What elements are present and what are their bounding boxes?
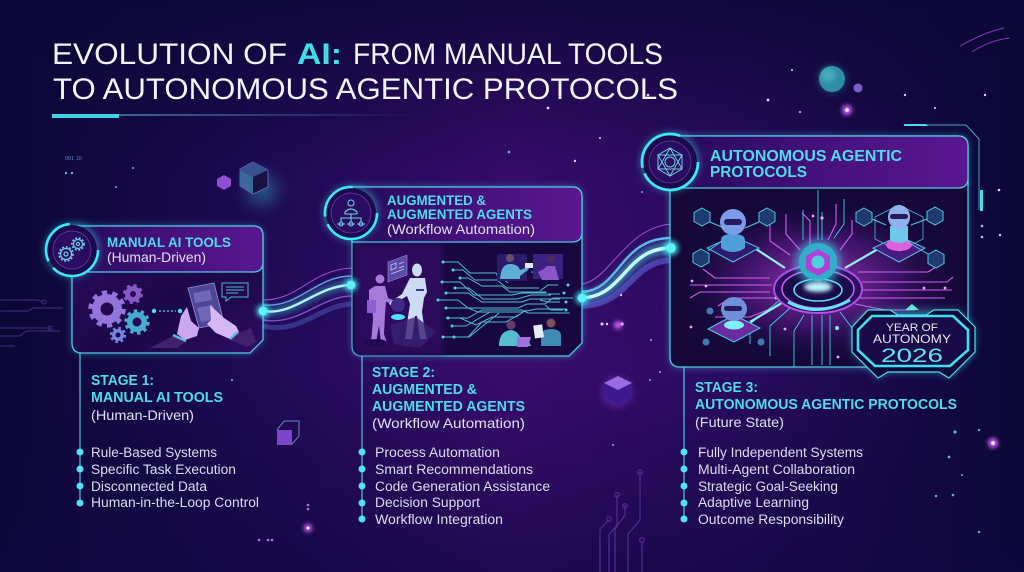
stage 3 text block: Strategic Goal-Seeking	[698, 479, 838, 494]
stage 2 text block: (Workflow Automation)	[372, 415, 525, 431]
stage 2 text block: STAGE 2:	[372, 365, 435, 381]
panel: stage 3 illustration card	[641, 133, 968, 367]
stage 3 text block: AUTONOMOUS AGENTIC PROTOCOLS	[695, 397, 957, 413]
stage 2 text block: AUGMENTED &	[372, 382, 478, 398]
stage 1 text block: Disconnected Data	[91, 479, 207, 494]
connector node stage 3	[663, 240, 679, 256]
stage 1 text block: Specific Task Execution	[91, 462, 236, 477]
stage 1 text block: (Human-Driven)	[91, 407, 194, 423]
robot figure	[389, 264, 427, 339]
robot agent bottom left	[702, 297, 764, 346]
icon: stage 3 network badge	[641, 133, 699, 191]
stage 2 text block: Workflow Integration	[375, 512, 503, 527]
stage 2 text block: Decision Support	[375, 495, 480, 510]
stage 3 text block: Outcome Responsibility	[698, 512, 844, 527]
icon: cube lower centre	[277, 421, 299, 445]
title: EVOLUTION OF	[52, 38, 287, 71]
small data text top left: 001 10	[65, 156, 82, 162]
stage 1 text block: Human-in-the-Loop Control	[91, 495, 259, 510]
panel: stage 1 illustration card	[45, 223, 263, 353]
stage 3 text block: Adaptive Learning	[698, 495, 809, 510]
badge: year of autonomy 2026	[852, 304, 975, 378]
title	[52, 38, 678, 106]
people on cards	[497, 254, 563, 347]
decorative left circuit traces	[0, 300, 63, 346]
stage 1 header band: MANUAL AI TOOLS	[107, 234, 231, 250]
stage 3 header band: PROTOCOLS	[710, 164, 807, 181]
title underline	[52, 114, 419, 118]
stage 1 text block: MANUAL AI TOOLS	[91, 390, 223, 406]
title: TO AUTONOMOUS AGENTIC PROTOCOLS	[53, 73, 678, 106]
stage 3 text block: STAGE 3:	[695, 380, 758, 396]
robot agent top right	[873, 205, 925, 262]
hex nodes	[693, 207, 944, 268]
stage 2 text block: Process Automation	[375, 445, 500, 460]
radial circuit lines	[690, 190, 953, 367]
decorative bottom-center circuit traces	[600, 470, 644, 572]
badge: year of autonomy 2026: AUTONOMY	[873, 334, 951, 346]
title: AI:	[297, 38, 342, 71]
stage 2 header band	[352, 187, 582, 242]
stage 3 text block	[680, 367, 957, 527]
icon: stage 1 gear badge	[45, 223, 99, 277]
human figure	[365, 274, 398, 347]
stage 1 header band: (Human-Driven)	[107, 249, 206, 265]
badge: year of autonomy 2026: YEAR OF	[886, 322, 938, 334]
robot agent top left	[707, 209, 759, 262]
stage 2 text block: Smart Recommendations	[375, 462, 533, 477]
robot platform	[390, 298, 436, 348]
central hub	[774, 239, 862, 313]
stage 3 text block: Fully Independent Systems	[698, 445, 863, 460]
title: FROM MANUAL TOOLS	[353, 38, 663, 71]
panel: stage 2 illustration card	[324, 186, 582, 356]
trace end dots	[436, 260, 570, 338]
arrow: connector stage 1 to stage 2	[263, 268, 352, 328]
icon: floating cubes upper left	[217, 162, 276, 204]
stage 2 text block: AUGMENTED AGENTS	[372, 399, 525, 415]
badge: year of autonomy 2026: 2026	[881, 346, 943, 367]
stage 3 header band: AUTONOMOUS AGENTIC	[710, 148, 902, 165]
circuit traces	[438, 262, 573, 337]
stage 3 header band	[670, 136, 968, 188]
planets	[818, 28, 1010, 93]
arrow: connector stage 2 to stage 3	[582, 224, 671, 306]
stage 2 text block: Code Generation Assistance	[375, 479, 550, 494]
stage 1 text block: Rule-Based Systems	[91, 445, 217, 460]
stage 1 text block: STAGE 1:	[91, 373, 154, 389]
stage 1 header band	[72, 226, 263, 272]
icon: stage 2 hierarchy badge	[324, 186, 378, 240]
icon: hands on tablet	[150, 283, 256, 348]
stage 3 text block: Multi-Agent Collaboration	[698, 462, 855, 477]
floating screen	[388, 255, 407, 282]
icon: cube near stage 3	[602, 376, 632, 407]
dotted link	[152, 309, 182, 313]
spokes to robots	[750, 245, 885, 322]
connector node stage 1	[256, 304, 270, 318]
stage 2 text block	[358, 356, 550, 527]
stage 1 text block	[76, 353, 259, 510]
icon: gears illustration	[90, 286, 148, 342]
stage 2 header band: AUGMENTED &	[387, 192, 486, 208]
connector nodes stage 2	[344, 278, 589, 305]
outer frame stage 3	[904, 124, 983, 238]
stage 3 text block: (Future State)	[695, 414, 784, 430]
star field	[65, 69, 1001, 541]
icon: speech bubble	[222, 283, 248, 301]
stage 2 header band: AUGMENTED AGENTS	[387, 206, 532, 222]
stage 2 header band: (Workflow Automation)	[387, 221, 535, 237]
